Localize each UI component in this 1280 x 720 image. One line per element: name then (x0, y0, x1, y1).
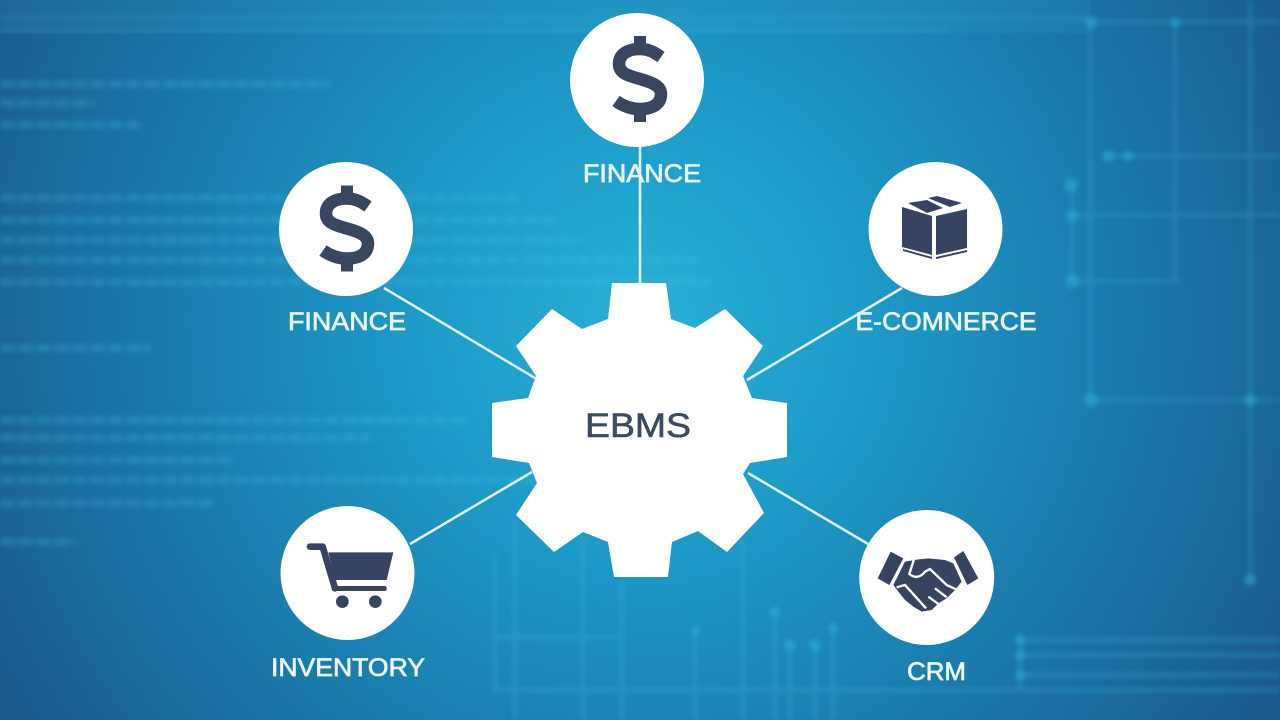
label: finance top: FINANCE (583, 160, 701, 188)
icon: box (902, 196, 967, 259)
connector lines (384, 146, 902, 544)
node: inventory (271, 506, 425, 682)
icon: dollar (616, 36, 661, 122)
label: crm: CRM (907, 658, 966, 686)
icon: handshake (878, 551, 978, 612)
label: finance left: FINANCE (288, 308, 406, 336)
node: crm (859, 510, 994, 686)
icon: cart (310, 547, 393, 608)
label: e-commerce: E-COMNERCE (856, 308, 1036, 336)
node: left finance (279, 162, 413, 336)
icon: dollar left (323, 186, 368, 272)
node: e-commerce (856, 162, 1036, 336)
central gear: EBMS (492, 283, 787, 577)
node: top finance (570, 13, 704, 188)
label: inventory: INVENTORY (271, 654, 425, 682)
gear label: EBMS (585, 407, 691, 445)
